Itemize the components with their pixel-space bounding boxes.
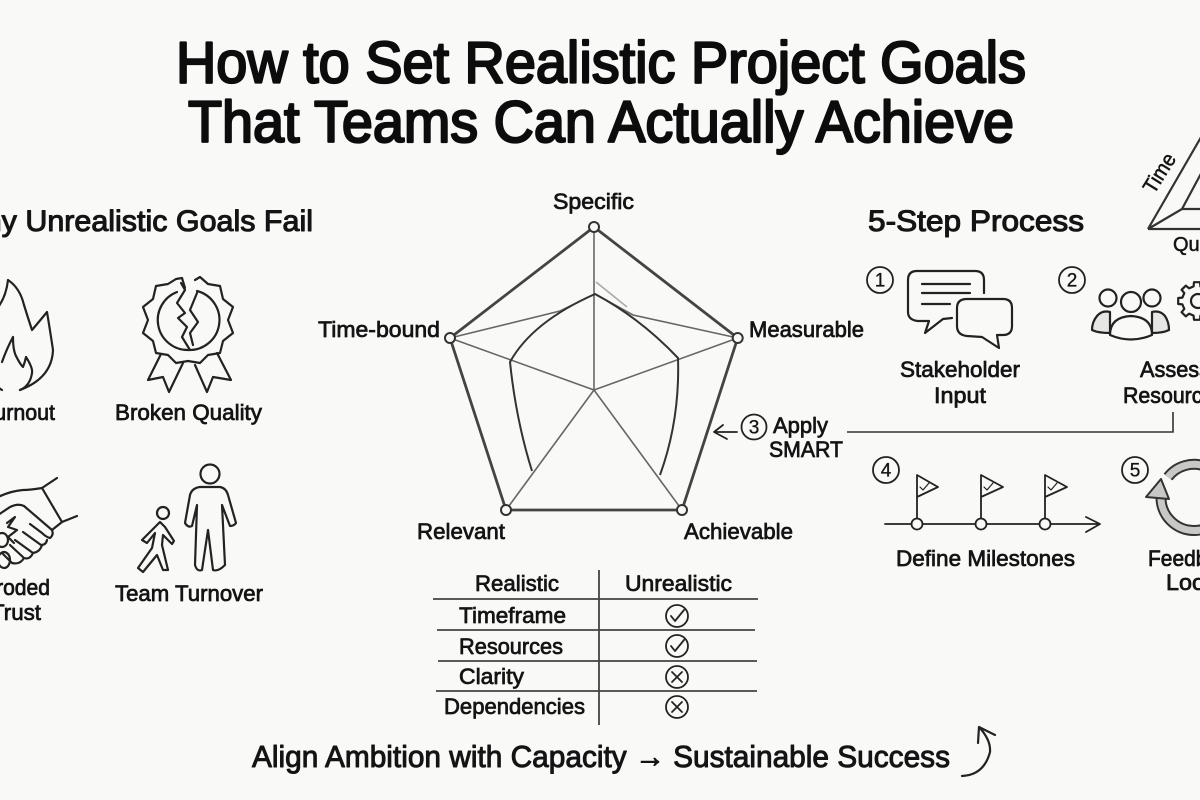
step 5 badge <box>1122 457 1148 483</box>
triangle diagram: time quality <box>1139 132 1200 256</box>
table header: realistic: Realistic <box>475 571 559 596</box>
icon: milestones timeline <box>885 475 1100 532</box>
row: resources: Resources <box>459 634 563 659</box>
label: stakeholder input: Stakeholder <box>900 357 1020 382</box>
icon: cross <box>666 696 688 718</box>
icon: curved arrow <box>962 727 995 776</box>
label: define milestones: Define Milestones <box>896 546 1075 571</box>
label: stakeholder input <box>900 357 1020 408</box>
radar label: achievable: Achievable <box>684 519 793 544</box>
step 1 badge: 1 <box>875 270 885 292</box>
step 3 badge <box>742 414 766 440</box>
icon: cross <box>666 666 688 688</box>
icon: feedback loop <box>1146 464 1200 531</box>
title: How to Set Realistic Project Goals <box>176 30 1026 96</box>
step 4 badge <box>873 457 899 483</box>
step 3 badge: 3 <box>749 418 759 438</box>
label: time: Time <box>1139 149 1181 198</box>
label: apply smart <box>769 413 843 462</box>
label: apply smart: SMART <box>769 437 843 462</box>
icon: check <box>666 635 688 657</box>
step 2 badge <box>1059 267 1085 293</box>
row: dependencies: Dependencies <box>444 694 585 719</box>
title: That Teams Can Actually Achieve <box>188 90 1014 155</box>
radar label: specific: Specific <box>553 189 634 214</box>
row: timeframe: Timeframe <box>459 603 566 628</box>
step 2 badge: 2 <box>1067 270 1077 292</box>
radar chart: SMART <box>318 189 864 544</box>
panel: 5-step process <box>714 205 1200 595</box>
icon: broken quality badge <box>143 277 233 392</box>
label: apply smart: Apply <box>773 413 829 438</box>
label: team turnover: Team Turnover <box>115 581 264 606</box>
radar label: time-bound: Time-bound <box>318 317 440 342</box>
title <box>176 30 1026 155</box>
heading: 5-step process: 5-Step Process <box>868 205 1084 238</box>
bottom takeaway: Align Ambition with Capacity → Sustainable Success <box>252 739 950 774</box>
table header: unrealistic: Unrealistic <box>625 571 732 596</box>
icon: check <box>666 605 688 627</box>
row: clarity: Clarity <box>459 664 525 689</box>
comparison table <box>433 570 758 725</box>
radar inner polygon <box>510 294 678 475</box>
radar vertices <box>445 222 743 515</box>
connector: step 2 to step 3 <box>847 412 1173 432</box>
triangle lines <box>1148 132 1200 229</box>
label: assess resources <box>1123 357 1200 408</box>
label: feedback loop <box>1148 546 1200 595</box>
radar spokes <box>450 227 738 510</box>
icon: team and gear <box>1092 282 1200 340</box>
icon: team turnover figures <box>138 464 236 572</box>
step 1 badge <box>867 267 893 293</box>
step 4 badge: 4 <box>881 460 892 482</box>
arrow: step 3 to radar <box>714 425 737 439</box>
label: broken quality: Broken Quality <box>115 400 263 425</box>
icon: broken handshake <box>0 478 77 568</box>
label: eroded trust <box>0 575 50 625</box>
radar outer pentagon <box>450 227 738 510</box>
radar label: relevant: Relevant <box>417 519 506 544</box>
label: stakeholder input: Input <box>934 383 987 408</box>
icon: speech bubbles <box>908 271 1012 348</box>
icon: flame <box>0 280 53 390</box>
table grid <box>433 570 758 725</box>
step 5 badge: 5 <box>1130 460 1140 482</box>
radar label: measurable: Measurable <box>749 317 864 342</box>
panel: why unrealistic goals fail <box>0 205 313 625</box>
